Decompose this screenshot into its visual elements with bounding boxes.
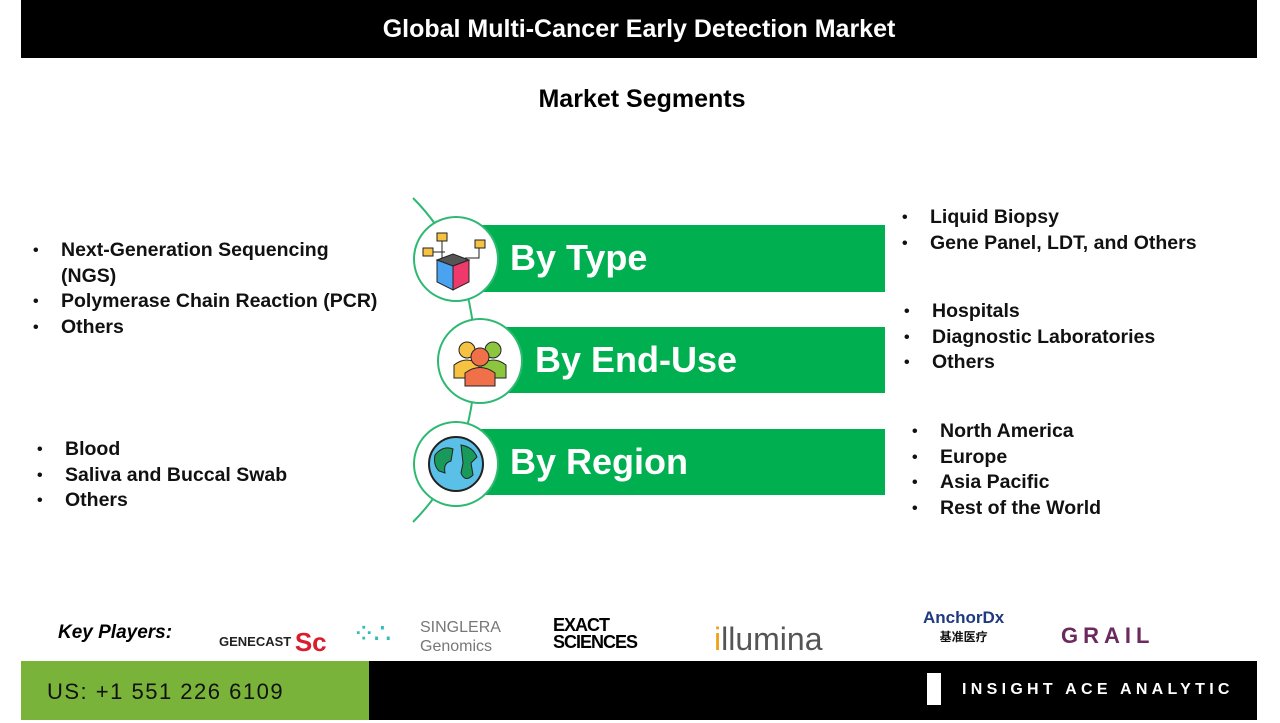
list: region right [912,420,1101,518]
subtitle: Market Segments [538,85,746,113]
list: end-use right: Others [932,351,995,373]
footer phone [21,661,369,720]
icon: people [437,318,523,404]
list: end-use right [904,300,1155,373]
footer phone: US: +1 551 226 6109 [47,679,284,704]
icon: type cube [413,216,499,302]
key players row: EXACT [553,615,609,635]
list: end-use right: Hospitals [932,300,1020,322]
footer brand: INSIGHT ACE ANALYTIC [962,681,1234,698]
list: region left: Saliva and Buccal Swab [65,464,287,486]
list: region left [38,438,287,511]
bar: by end-use: By End-Use [535,339,737,380]
bar: by region [480,429,885,495]
key players row [58,608,1154,657]
list: type left: Others [61,316,124,338]
key players row: SINGLERA [420,619,501,636]
list: region right: Rest of the World [940,496,1101,518]
key players row: GRAIL [1061,623,1154,648]
bar: by type [480,225,885,292]
bar: by type: By Type [510,237,647,278]
key players row: 基准医疗 [940,630,988,644]
key players row: GENECAST Sc [219,627,327,657]
key players row: ⁘∴ [352,618,389,649]
list: type left [34,239,377,338]
bar: by region: By Region [510,441,688,482]
list: region right: Europe [940,446,1007,468]
key players row: illumina [714,621,822,657]
list: region right: Asia Pacific [940,471,1049,493]
key players row: SCIENCES [553,632,637,652]
list: type left: Next-Generation Sequencing (NGS) [61,239,329,286]
list: type right [902,206,1197,254]
list: end-use right: Diagnostic Laboratories [932,326,1155,348]
list: region right: North America [940,420,1074,442]
key players row: AnchorDx [923,608,1004,627]
title bar [21,0,1257,58]
list: type right: Gene Panel, LDT, and Others [930,232,1197,254]
list: region left: Blood [65,438,120,460]
list: region left: Others [65,489,128,511]
list: type right: Liquid Biopsy [930,206,1059,228]
list: type left: Polymerase Chain Reaction (PCR) [61,290,377,312]
icon: globe [413,421,499,507]
key players row: Key Players: [58,622,172,643]
key players row: Genomics [420,638,492,655]
connector line [412,197,474,523]
bar: by end-use [505,327,885,393]
title bar: Global Multi-Cancer Early Detection Market [383,15,895,43]
footer brand [369,661,1257,720]
